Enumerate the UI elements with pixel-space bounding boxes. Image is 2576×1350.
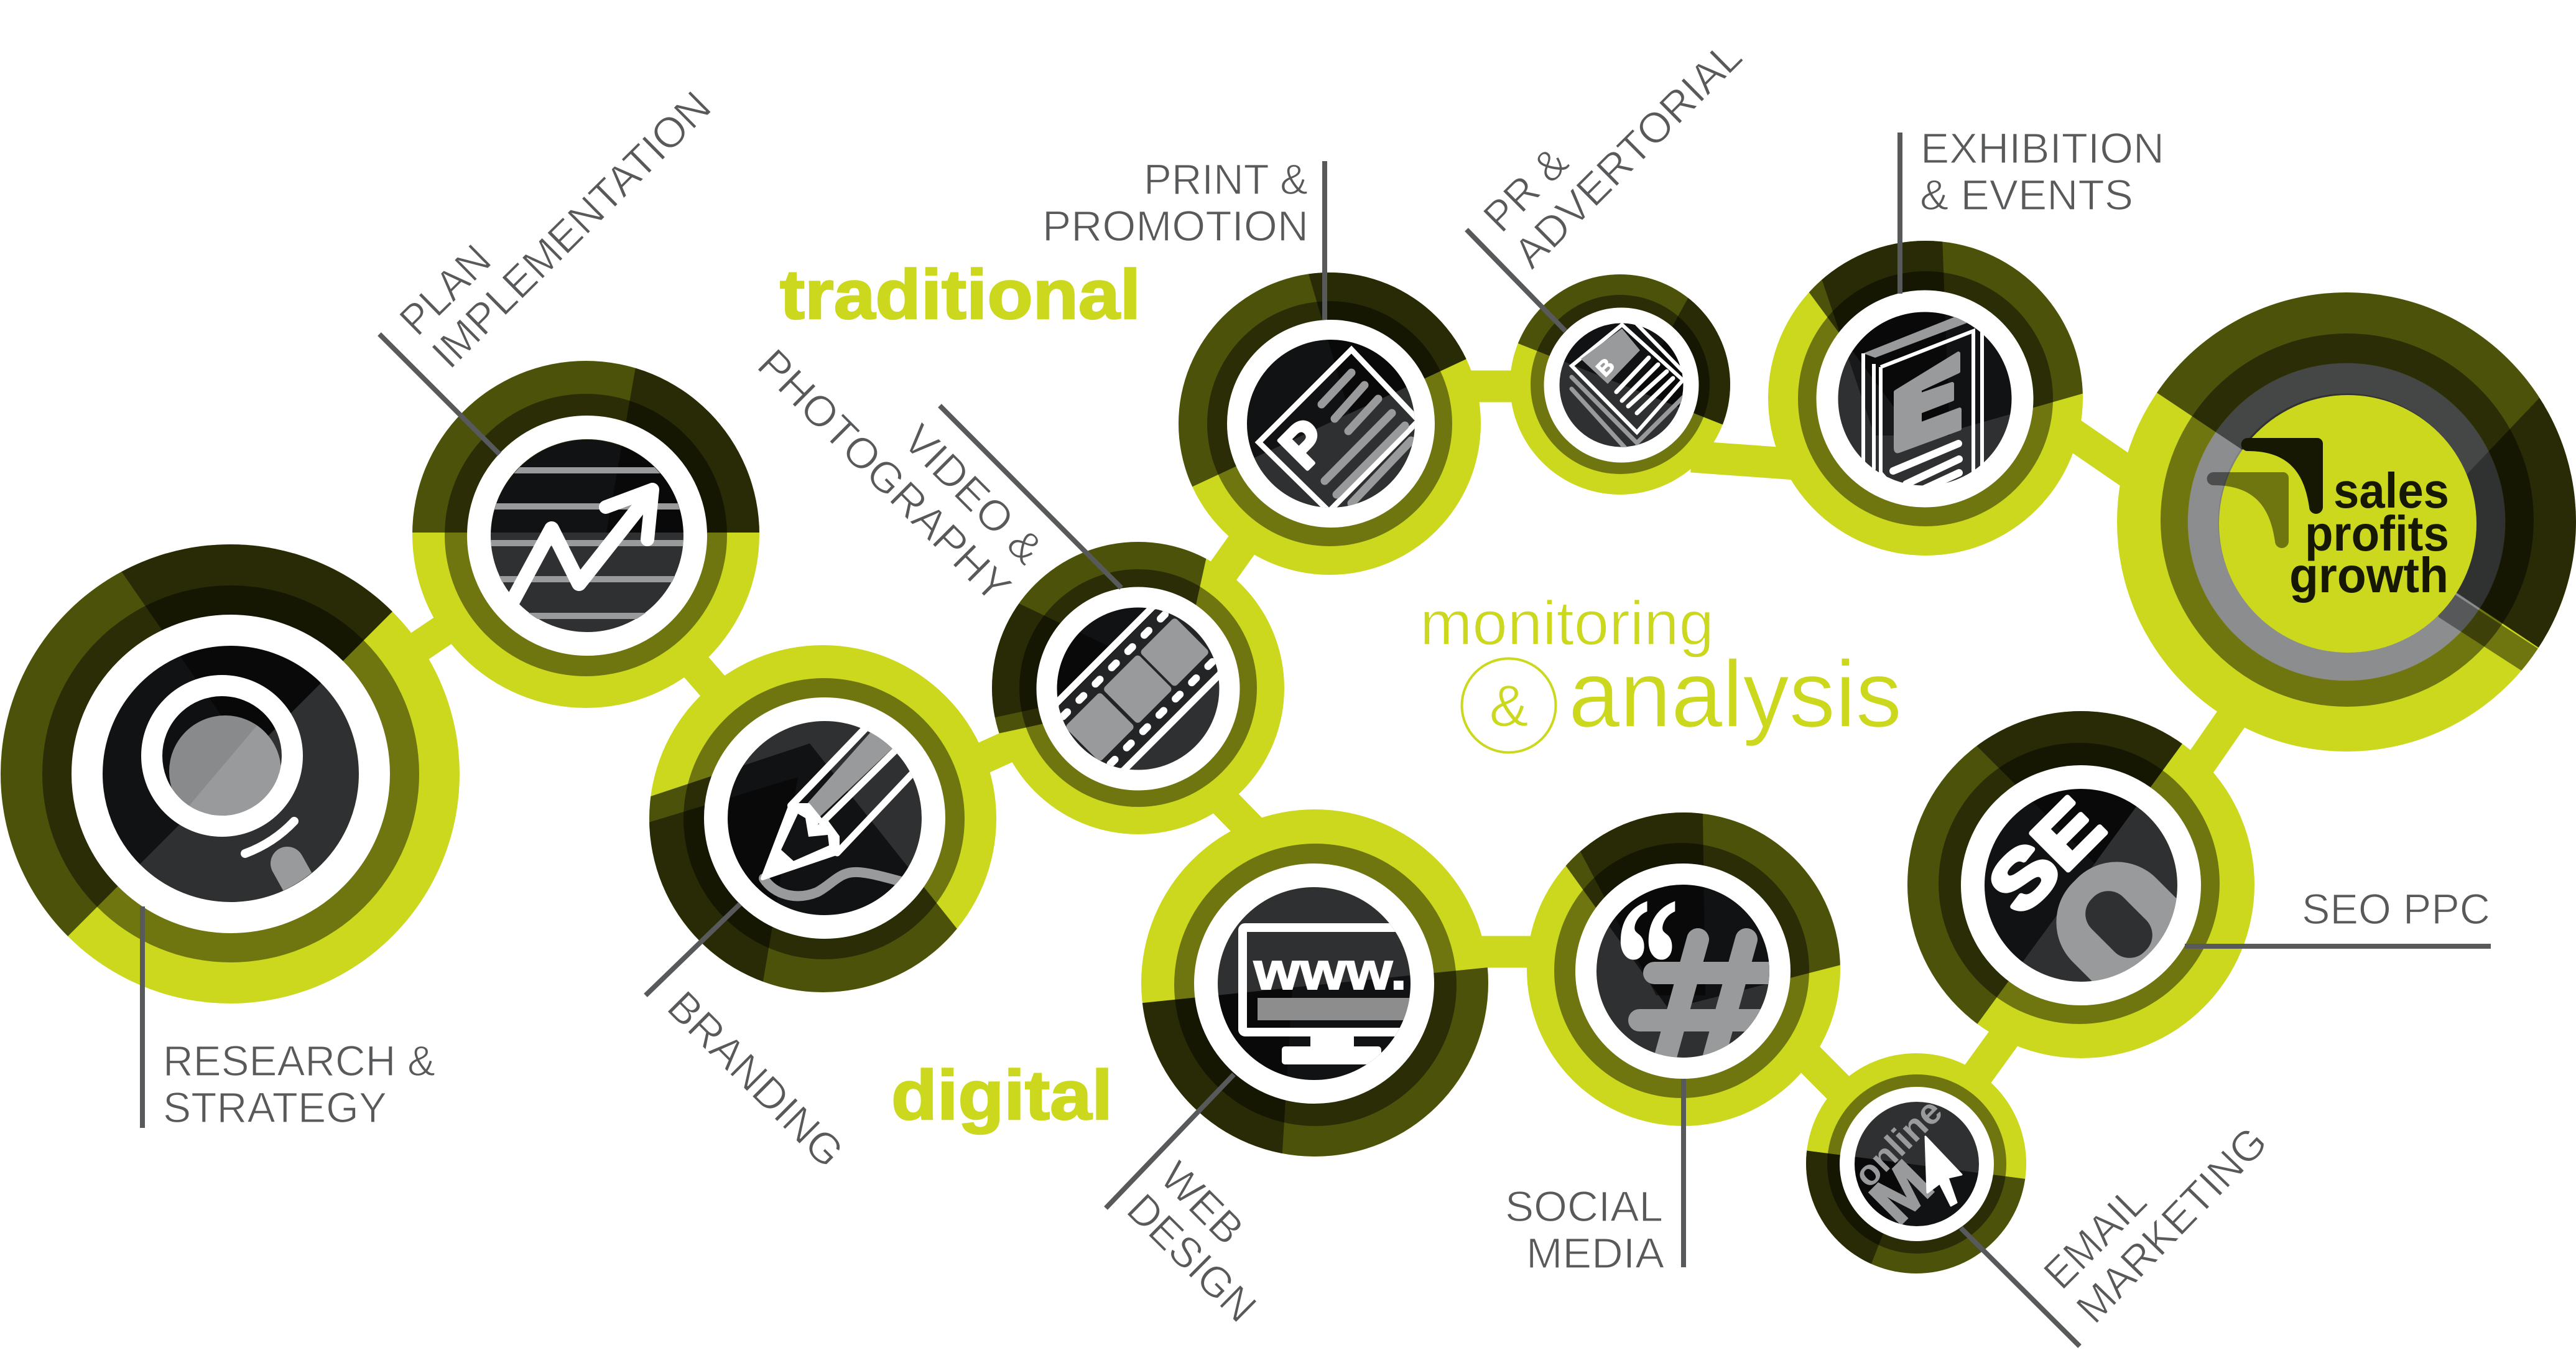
label: PR and advertorial: PR & [1474,137,1577,241]
label: print and promotion [1042,156,1325,320]
heading: monitoring and analysis: analysis [1568,641,1902,747]
icon: monitor www [1238,923,1409,1064]
icon: film strip [1057,608,1219,770]
node: PR and advertorial [1511,274,1730,495]
label: video and photography: VIDEO & [894,415,1052,574]
label: email marketing: EMAIL [2034,1176,2156,1298]
node: video and photography [992,542,1284,834]
label: branding: BRANDING [658,982,853,1176]
label: print and promotion: PROMOTION [1042,202,1309,250]
label: research and strategy: RESEARCH & [163,1037,435,1085]
label: social media: MEDIA [1526,1229,1664,1277]
icon: magnifying glass [152,686,317,917]
label: web design [1106,1074,1266,1331]
label: PR and advertorial: ADVERTORIAL [1504,32,1751,277]
label: social media: SOCIAL [1505,1183,1663,1231]
icon: logo shapes [2207,438,2323,548]
label: exhibition and events: EXHIBITION [1920,124,2164,172]
label: research and strategy: STRATEGY [163,1084,387,1132]
text: sales profits growth: profits [2305,506,2449,561]
icon: printed page: P [1267,407,1341,480]
node: research and strategy [1,544,460,1003]
icon: quote and hashtag: “ [1615,860,1679,1067]
node: branding [649,645,996,992]
icon: pencil [762,728,914,896]
label: branding [646,904,853,1176]
node: email marketing [1806,1053,2026,1273]
node: plan implementation [412,361,759,708]
node: SEO PPC [1907,711,2254,1058]
label: email marketing: MARKETING [2067,1118,2276,1332]
connectors between the circles [348,386,2251,1115]
icon: advertorial pages: B [1592,354,1619,381]
node: print and promotion [1179,272,1481,575]
icon: online mouse cursor [1860,1104,1963,1224]
label: social media [1505,1079,1684,1277]
text: sales profits growth [2289,463,2449,603]
icon: online mouse cursor: online [1846,1091,1950,1195]
icon: monitor www: www. [1253,942,1407,1000]
label: plan implementation: IMPLEMENTATION [422,82,720,378]
label: print and promotion: PRINT & [1144,156,1308,203]
label: SEO PPC: SEO PPC [2302,885,2490,933]
label: research and strategy [142,906,435,1132]
icon: printed page [1259,350,1419,511]
label: email marketing [1961,1118,2276,1346]
icon: online mouse cursor: M [1856,1147,1947,1237]
node: exhibition and events [1768,241,2083,556]
label: web design: DESIGN [1118,1185,1266,1331]
icon: quote and hashtag [1621,901,1769,1058]
icon: exhibition stand book [1863,317,1982,491]
label: web design: WEB [1151,1152,1253,1254]
icon: ampersand circle: & [1489,673,1529,739]
label: plan implementation [379,82,720,454]
heading: monitoring and analysis: monitoring [1420,589,1714,658]
label: exhibition and events [1900,124,2164,294]
icon: SEO letters [1991,795,2177,981]
node: social media [1527,812,1840,1126]
heading: traditional: traditional [780,256,1141,333]
heading: monitoring and analysis [1420,589,1902,753]
text: sales profits growth: sales [2333,463,2449,518]
node: sales profits growth [2117,292,2576,752]
label: video and photography: PHOTOGRAPHY [748,340,1020,612]
icon: rising chart arrow [485,467,690,619]
icon: ampersand circle [1462,658,1556,753]
node: web design [1141,809,1488,1157]
label: exhibition and events: & EVENTS [1920,171,2133,219]
icon: SEO letters: SE [1972,782,2120,929]
heading: digital: digital [891,1056,1113,1134]
label: plan implementation: PLAN [391,235,500,345]
icon: advertorial pages [1572,324,1689,449]
text: sales profits growth: growth [2289,547,2449,603]
